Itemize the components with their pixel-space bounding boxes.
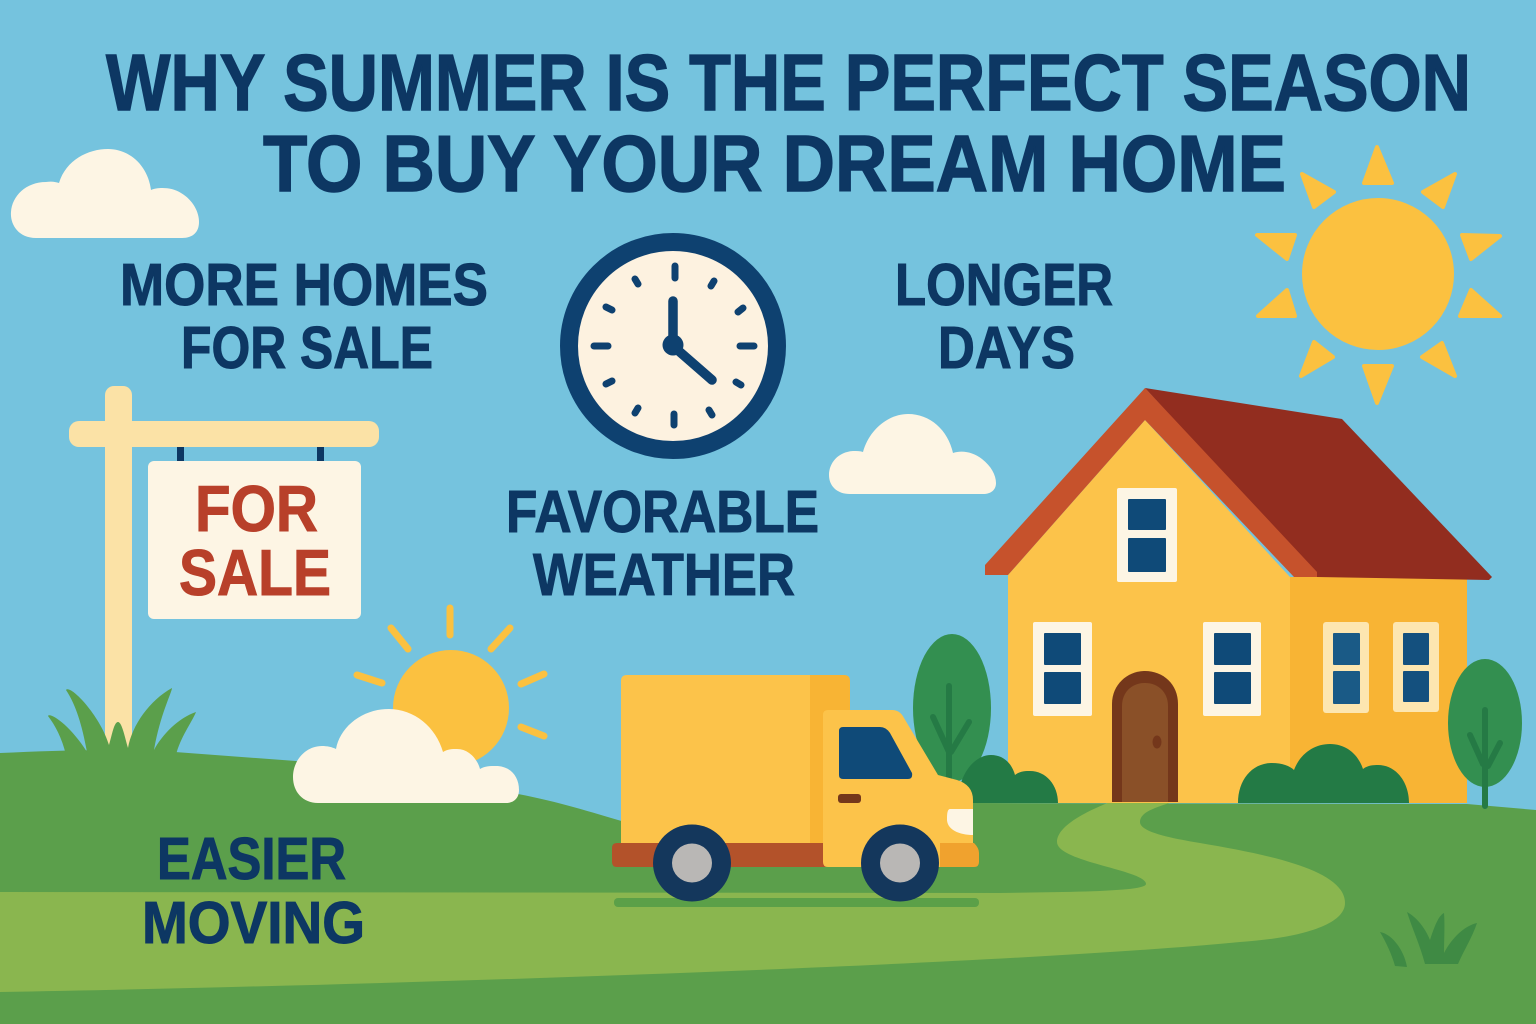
icon: house: [985, 388, 1492, 803]
icon: grass tuft by sign: [48, 688, 196, 755]
heading: longer days: LONGER: [895, 252, 1113, 318]
truck cab: [823, 710, 973, 867]
icon: tree right of house: [1448, 659, 1522, 806]
icon: bush left of house: [958, 755, 1058, 803]
window: lower left: [1033, 622, 1092, 716]
sign text: FOR: [195, 472, 318, 545]
truck shadow: [614, 898, 979, 907]
sign text: SALE: [179, 536, 331, 609]
heading: favorable weather: FAVORABLE: [506, 479, 819, 545]
truck box: [621, 675, 810, 845]
headlight: [947, 809, 973, 835]
icon: small sun behind cloud: [357, 608, 544, 766]
icon: large sun: [1257, 147, 1500, 403]
window: side left: [1323, 622, 1369, 713]
heading: longer days: [895, 252, 1113, 381]
icon: grass tuft right: [1380, 912, 1477, 967]
icon: moving truck: [612, 675, 979, 907]
hills and path: [0, 750, 1536, 1024]
icon: clock: [569, 242, 777, 450]
door handle: [838, 794, 861, 803]
heading: favorable weather: [506, 479, 819, 608]
heading: easier moving: [142, 826, 365, 956]
icon: cloud middle: [829, 414, 996, 494]
truck bumper: [930, 843, 979, 867]
heading: more homes for sale: FOR SALE: [181, 315, 433, 381]
door: [1112, 671, 1178, 802]
truck chassis: [612, 843, 826, 867]
icon: cloud lower: [293, 709, 519, 803]
title: TO BUY YOUR DREAM HOME: [263, 119, 1286, 208]
icon: tree left of house: [913, 634, 991, 790]
heading: favorable weather: WEATHER: [533, 542, 795, 608]
heading: more homes for sale: [120, 252, 488, 381]
title: [106, 38, 1471, 208]
icon: bush right of house: [1238, 744, 1409, 803]
window: attic: [1117, 488, 1177, 582]
sign text: [179, 472, 331, 609]
truck window: [839, 727, 912, 779]
icon: cloud top left: [11, 149, 199, 238]
icon: for sale sign: [69, 386, 379, 752]
roof: [1145, 388, 1492, 580]
heading: easier moving: MOVING: [142, 890, 365, 956]
heading: easier moving: EASIER: [157, 826, 346, 892]
heading: more homes for sale: MORE HOMES: [120, 252, 488, 318]
truck wheels: [653, 824, 939, 902]
window: lower centre: [1203, 622, 1261, 716]
window: side right: [1393, 622, 1439, 712]
heading: longer days: DAYS: [938, 315, 1075, 381]
house walls: [1008, 420, 1290, 803]
